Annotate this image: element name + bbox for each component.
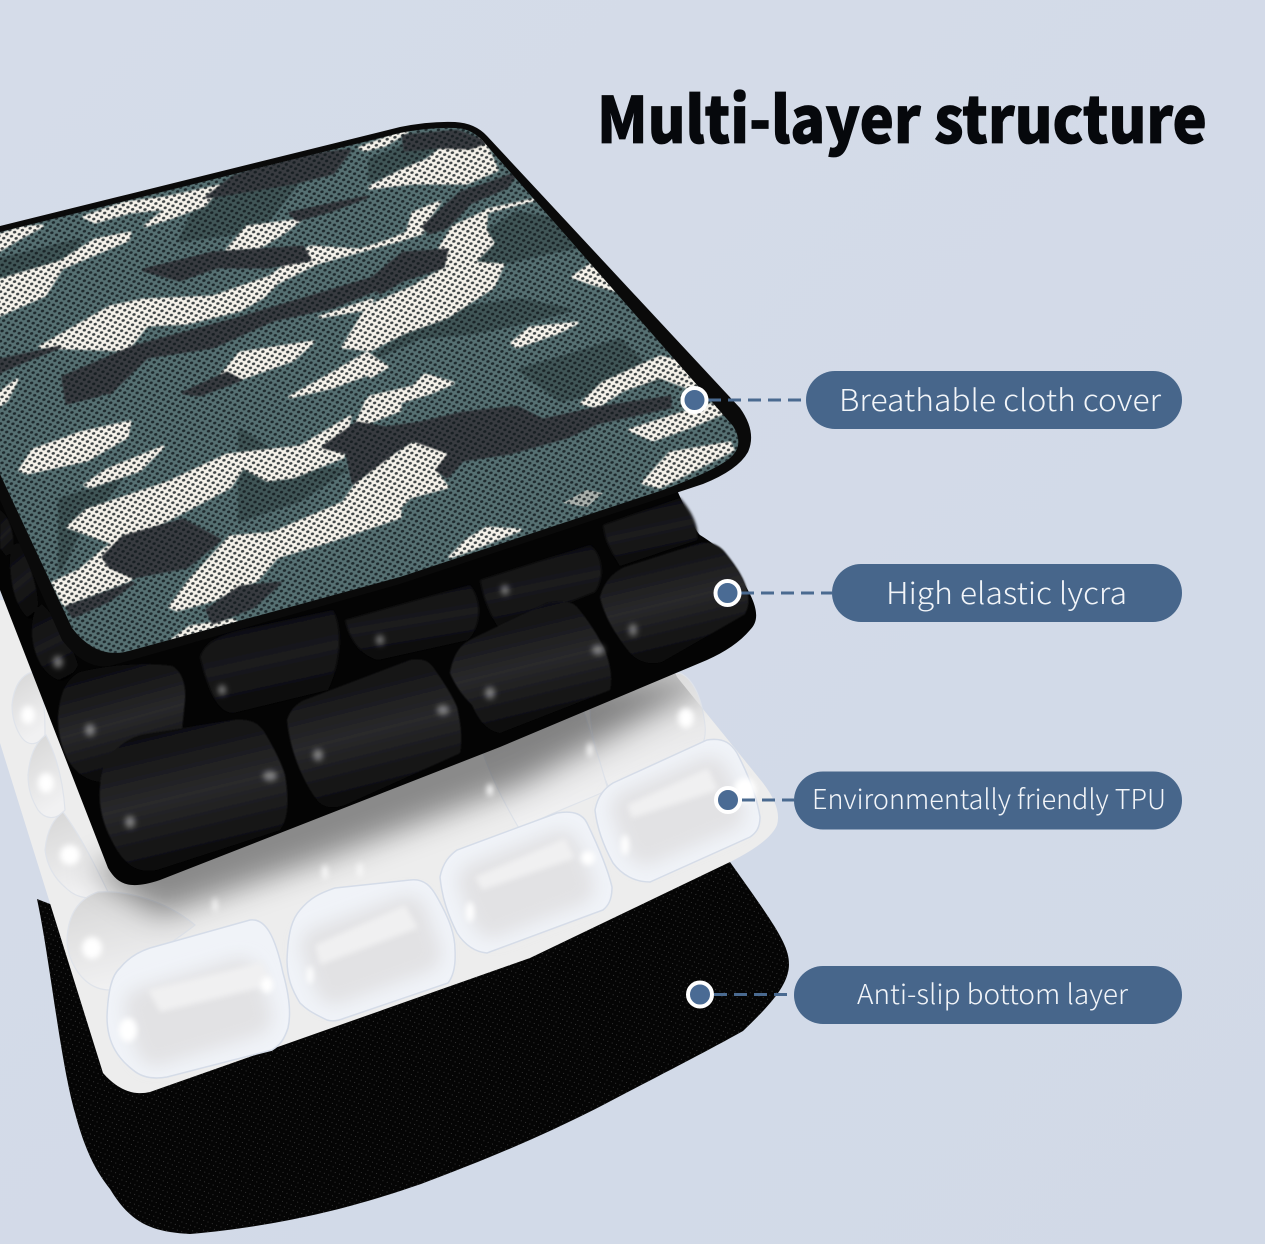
camouflage mesh fabric: [0, 120, 760, 680]
mesh holes: [0, 120, 760, 680]
dark teal patches: [0, 135, 660, 570]
layer: anti-slip bottom layer: [37, 862, 789, 1234]
lycra base: [0, 480, 756, 885]
grey worn patch: [563, 490, 603, 507]
cushion highlights: [53, 585, 637, 828]
back bubble highlights: [21, 706, 694, 959]
callout: environmentally friendly TPU: [716, 772, 1182, 830]
layer: high elastic lycra: [0, 480, 756, 885]
light camouflage patches: [0, 132, 733, 648]
cover black rim: [0, 122, 751, 666]
back row TPU bubbles: [12, 672, 705, 990]
layer: breathable cloth cover: [0, 120, 760, 680]
callout: anti-slip bottom layer: Anti-slip bottom layer: [857, 972, 1128, 1012]
dark camouflage patches: [0, 131, 670, 623]
front cushions: [58, 543, 748, 871]
callout: breathable cloth cover: [682, 371, 1182, 429]
bubble highlights: [119, 778, 756, 1042]
front TPU bubbles: [107, 739, 760, 1078]
bubble interiors: [119, 750, 750, 1071]
callout: high elastic lycra: High elastic lycra: [886, 569, 1127, 613]
callout: breathable cloth cover: Breathable cloth cover: [839, 376, 1161, 420]
layer: environmentally friendly TPU: [0, 600, 778, 1093]
TPU plate: [0, 600, 778, 1093]
title: Multi-layer structure: [597, 70, 1207, 162]
side bumps: [0, 510, 78, 680]
callout: high elastic lycra: [716, 564, 1182, 622]
callout: environmentally friendly TPU: Environmentally friendly TPU: [812, 777, 1166, 817]
callout: anti-slip bottom layer: [688, 966, 1182, 1024]
second row cushions: [200, 498, 697, 713]
bubble top flats: [148, 768, 718, 1012]
shadow under cushion layer: [90, 675, 720, 915]
